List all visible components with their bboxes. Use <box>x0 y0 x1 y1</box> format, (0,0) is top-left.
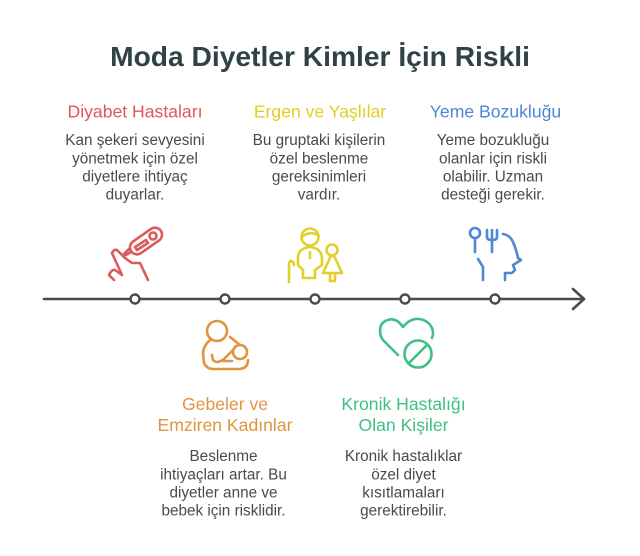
icon: heart with prohibition sign <box>380 319 433 368</box>
text block: Gebeler ve Emziren Kadınlar: ihtiyaçları artar. Bu <box>160 466 287 483</box>
text block: Gebeler ve Emziren Kadınlar: diyetler anne ve <box>170 485 278 502</box>
text block: Ergen ve Yaşlılar: vardır. <box>298 187 340 204</box>
panel: Kronik Hastalığı Olan Kişiler <box>341 319 466 520</box>
text block: Kronik Hastalığı Olan Kişiler: özel diyet <box>371 466 437 483</box>
text block: Diyabet Hastaları: Kan şekeri sevyesini <box>65 132 205 149</box>
text block: Ergen ve Yaşlılar: gereksinimleri <box>272 169 366 186</box>
heading: Kronik Hastalığı Olan Kişiler: Kronik Hastalığı <box>341 394 466 414</box>
icon: head with spoon and fork <box>470 228 521 280</box>
text block: Ergen ve Yaşlılar: özel beslenme <box>270 150 368 167</box>
icon: elderly person and child <box>289 228 342 282</box>
panel: Yeme Bozukluğu <box>430 102 561 280</box>
heading: Diyabet Hastaları: Diyabet Hastaları <box>68 102 202 122</box>
icon: glucose meter and finger <box>109 225 165 280</box>
panel: Gebeler ve Emziren Kadınlar <box>158 321 293 520</box>
text block: Kronik Hastalığı Olan Kişiler: Kronik hastalıklar <box>345 448 462 465</box>
heading: Gebeler ve Emziren Kadınlar: Emziren Kadınlar <box>158 415 293 435</box>
text block: Diyabet Hastaları: duyarlar. <box>106 187 164 204</box>
text block: Gebeler ve Emziren Kadınlar: Beslenme <box>189 448 258 465</box>
text block: Diyabet Hastaları: yönetmek için özel <box>72 150 198 167</box>
text block: Gebeler ve Emziren Kadınlar: bebek için risklidir. <box>161 503 286 520</box>
heading: Gebeler ve Emziren Kadınlar: Gebeler ve <box>182 394 268 414</box>
text block: Yeme Bozukluğu: olabilir. Uzman <box>443 169 543 186</box>
heading: Yeme Bozukluğu: Yeme Bozukluğu <box>430 102 561 122</box>
text block: Yeme Bozukluğu: Yeme bozukluğu <box>437 132 549 149</box>
panel: Diyabet Hastaları <box>65 102 205 280</box>
timeline markers <box>130 294 500 304</box>
text block: Yeme Bozukluğu: desteği gerekir. <box>441 187 545 204</box>
title: Moda Diyetler Kimler İçin Riskli <box>110 40 530 72</box>
heading: Ergen ve Yaşlılar: Ergen ve Yaşlılar <box>254 102 386 122</box>
timeline arrow <box>44 289 584 309</box>
text block: Ergen ve Yaşlılar: Bu gruptaki kişilerin <box>253 132 385 149</box>
text block: Yeme Bozukluğu: olanlar için riskli <box>439 150 547 167</box>
icon: mother holding baby <box>203 321 248 369</box>
text block: Kronik Hastalığı Olan Kişiler: kısıtlamaları <box>362 485 445 502</box>
heading: Kronik Hastalığı Olan Kişiler: Olan Kişiler <box>359 415 449 435</box>
text block: Diyabet Hastaları: diyetlere ihtiyaç <box>82 169 188 186</box>
panel: Ergen ve Yaşlılar <box>253 102 386 282</box>
text block: Kronik Hastalığı Olan Kişiler: gerektirebilir. <box>360 503 447 520</box>
